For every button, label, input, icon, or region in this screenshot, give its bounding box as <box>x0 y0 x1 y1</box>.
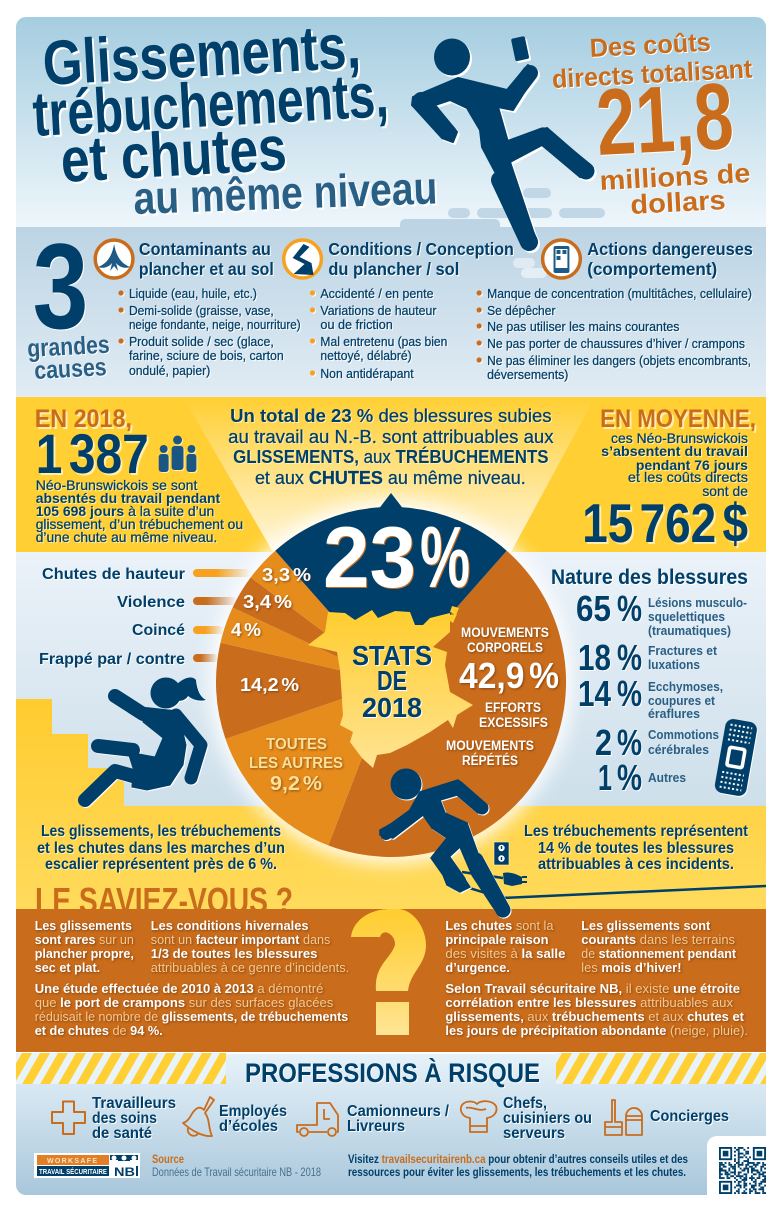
text: absences 2018: absentés du travail pendant <box>36 491 221 506</box>
pie label: others <box>249 736 343 795</box>
stat: 18% <box>578 637 718 678</box>
slice: 23% <box>275 493 507 682</box>
map label: Stats de 2018: STATS <box>352 640 432 671</box>
fact: clean floors: Les glissements <box>35 918 132 933</box>
causes background <box>16 227 766 397</box>
text: absences 2018: 105 698 jours à la suite d’un <box>36 504 214 519</box>
stat: 1%: Autres <box>648 770 686 785</box>
stat: 14% <box>578 673 723 721</box>
fact: precipitation: glissements, aux trébuchements et aux chutes et <box>445 1009 745 1024</box>
pie label: others: 9,2 % <box>270 773 322 795</box>
cost value: 21,8 <box>594 63 736 175</box>
fact: parking: Les glissements sont <box>581 918 711 933</box>
list: conditions: nettoyé, délabré) <box>320 348 412 363</box>
heading: nature: Nature des blessures <box>551 566 748 589</box>
fact: parking <box>581 918 737 975</box>
heading: contaminants: Contaminants au <box>139 239 271 259</box>
text: visit website: Visitez travailsecuritairenb.ca pour obtenir d’autres conseils utiles et des <box>348 1154 688 1166</box>
panel: professions <box>52 1095 729 1142</box>
text: average absence: sont de <box>702 484 748 499</box>
stat: 14%: éraflures <box>648 706 700 721</box>
profession: janitors <box>605 1100 729 1135</box>
big 23%: % <box>420 510 470 606</box>
fact: parking: courants dans les terrains <box>581 932 735 947</box>
text: tripping fact <box>524 823 748 873</box>
fact: parking: de stationnement pendant <box>581 946 737 961</box>
text: stairs fact: Les glissements, les trébuchements <box>41 823 281 840</box>
stat: 65%: (traumatiques) <box>648 623 731 638</box>
text: average absence <box>601 431 748 499</box>
number: 15 762 $: 15 762 $ <box>582 492 748 554</box>
legend: violence: Violence <box>117 594 185 611</box>
pie label: right: MOUVEMENTS <box>446 738 534 753</box>
list: contaminants <box>118 286 301 378</box>
text: absences 2018: d’une chute au même niveau. <box>36 530 217 545</box>
cost line 4: dollars <box>630 185 726 220</box>
big question mark <box>351 909 426 1035</box>
hazard stripes right <box>556 1053 766 1084</box>
list: actions: Ne pas porter de chaussures d’hiver / crampons <box>487 336 745 351</box>
logo: WorkSafe NB: WORKSAFE <box>47 1158 97 1165</box>
text: central statement: et aux CHUTES au même niveau. <box>255 467 526 488</box>
list: conditions: Mal entretenu (pas bien <box>320 334 447 349</box>
map label: Stats de 2018 <box>352 640 432 723</box>
icon: tripping runner <box>380 768 508 917</box>
title line 1: Glissements, <box>41 11 362 99</box>
list: actions: Manque de concentration (multitâches, cellulaire) <box>487 286 752 301</box>
icon: phone <box>543 240 580 278</box>
stat: 2%: % <box>617 722 642 763</box>
middle background <box>16 552 766 807</box>
stat: 65% <box>576 588 747 638</box>
slice: 3.4% <box>233 577 391 682</box>
header background <box>16 17 766 227</box>
fact: winter: 1/3 de toutes les blessures <box>151 946 317 961</box>
slice: others 9.2% <box>226 682 391 845</box>
heading: conditions <box>328 239 514 279</box>
fact: winter: sont un facteur important dans <box>151 932 330 947</box>
icon: contaminants <box>95 240 133 278</box>
legend: struck: Frappé par / contre <box>39 651 185 668</box>
profession: truckers: Camionneurs / <box>347 1103 450 1120</box>
bottom background <box>16 1054 766 1195</box>
pie label: right <box>446 625 559 768</box>
big number 3: 3 <box>33 218 88 354</box>
pie value labels left: 14,2 % <box>240 675 299 695</box>
heading: contaminants <box>139 239 274 279</box>
pie label: right: 42,9 % <box>459 655 559 696</box>
fact: emergency <box>445 918 565 975</box>
stat: 65%: % <box>617 588 642 629</box>
fact: emergency: des visites à la salle <box>445 946 565 961</box>
heading: actions: (comportement) <box>587 259 717 279</box>
stat: 65%: squelettiques <box>648 609 725 624</box>
number: 1 387: 1 387 <box>36 423 149 485</box>
heading: actions <box>587 239 753 279</box>
stat: 18%: % <box>617 637 642 678</box>
text: visit website <box>348 1154 688 1179</box>
legend: caught <box>132 622 224 639</box>
fact: precipitation: corrélation entre les blessures attribuables aux <box>445 995 734 1010</box>
icon: cord and plug <box>462 872 766 898</box>
fact: crampons: Une étude effectuée de 2010 à 2013 a démontré <box>35 981 323 996</box>
title line 3: et chutes <box>59 113 288 196</box>
slice: 14.2% <box>216 643 391 739</box>
list: contaminants: Demi-solide (graisse, vase, <box>129 303 274 318</box>
icon: woman falling on stairs <box>85 678 206 800</box>
title line 2: trébuchements, <box>31 60 390 150</box>
fact: precipitation <box>445 981 748 1038</box>
text: stairs fact: escalier représentent près de 6 %. <box>45 856 277 873</box>
slice: 3.3% <box>251 551 391 682</box>
text: source: Données de Travail sécuritaire NB - 2018 <box>152 1165 321 1179</box>
statistics yellow background <box>16 397 766 552</box>
text: stairs fact: et les chutes dans les marches d’un <box>37 840 285 857</box>
icon: wall socket <box>494 842 509 865</box>
fact: crampons <box>35 981 348 1038</box>
label: grandes causes <box>27 331 110 385</box>
text: tripping fact: Les trébuchements représentent <box>524 823 748 840</box>
title <box>31 11 438 224</box>
profession: chefs: serveurs <box>503 1125 565 1142</box>
fact: parking: les mois d’hiver! <box>581 960 682 975</box>
yellow stairs and ground <box>16 699 766 909</box>
slice: 4% <box>220 608 391 682</box>
pie label: right: EXCESSIFS <box>479 715 548 730</box>
stat: 1% <box>598 757 686 798</box>
fact: winter: attribuables à ce genre d’incidents. <box>151 960 349 975</box>
text: tripping fact: attribuables à ces incidents. <box>538 856 734 873</box>
legend: violence <box>117 594 237 611</box>
panel: nature of injuries <box>551 566 758 798</box>
fact: clean floors: sec et plat. <box>35 960 100 975</box>
legend: falls from height <box>42 566 251 583</box>
text: average absence: et les coûts directs <box>628 470 748 485</box>
list: actions: Se dépêcher <box>487 303 556 318</box>
hazard stripes left <box>16 1053 226 1084</box>
panel: 2018 statistics <box>35 405 756 554</box>
cost line 3: millions de <box>599 158 751 196</box>
profession: truckers: Livreurs <box>347 1118 405 1135</box>
heading: En 2018: EN 2018, <box>35 405 132 433</box>
stat: 65%: Lésions musculo- <box>648 595 747 610</box>
profession: truckers <box>297 1103 450 1136</box>
list: contaminants: farine, sciure de bois, carton <box>129 348 284 363</box>
profession: school employees: Employés <box>219 1103 287 1120</box>
icon: people <box>159 436 196 472</box>
pie glow <box>209 500 573 864</box>
profession: chefs <box>461 1095 592 1142</box>
fact: precipitation: Selon Travail sécuritaire NB, il existe une étroite <box>445 981 740 996</box>
pie value labels left: 4 % <box>231 620 261 640</box>
logo: WorkSafe NB: TRAVAIL SÉCURITAIRE <box>39 1167 107 1176</box>
text: central statement: GLISSEMENTS, aux TRÉBUCHEMENTS <box>233 446 549 467</box>
stat: 18%: Fractures et <box>648 643 718 658</box>
icon: winding road <box>284 240 321 278</box>
logo: WorkSafe NB: NB <box>114 1165 135 1179</box>
fact: emergency: principale raison <box>445 932 549 947</box>
fact: winter: Les conditions hivernales <box>151 918 309 933</box>
pie label: right: EFFORTS <box>485 700 541 715</box>
label: grandes causes: grandes <box>27 331 110 363</box>
text: average absence: s’absentent du travail <box>601 444 748 459</box>
profession: health care: des soins <box>92 1110 157 1127</box>
profession: school employees: d’écoles <box>219 1118 278 1135</box>
heading: conditions: du plancher / sol <box>328 259 459 279</box>
title line 4: au même niveau <box>133 161 438 224</box>
icon: bandage <box>714 718 758 797</box>
slice: efforts 42.9% <box>328 551 566 857</box>
stat: 1%: % <box>617 757 642 798</box>
profession: chefs: Chefs, <box>503 1095 547 1112</box>
text: absences 2018 <box>36 478 243 545</box>
heading: conditions: Conditions / Conception <box>328 239 514 259</box>
map label: Stats de 2018: DE <box>377 665 407 696</box>
pie label: others: TOUTES <box>266 736 327 753</box>
cost line 2: directs totalisant <box>551 55 753 94</box>
map label: Stats de 2018: 2018 <box>362 692 422 723</box>
heading: contaminants: plancher et au sol <box>139 259 274 279</box>
stat: 65%: 65 <box>576 588 611 629</box>
label: grandes causes: causes <box>34 353 107 385</box>
profession: chefs: cuisiniers ou <box>503 1110 592 1127</box>
pie chart <box>216 493 566 857</box>
text: source <box>152 1152 321 1179</box>
brown overlap <box>16 909 356 917</box>
list: conditions: Variations de hauteur <box>320 303 437 318</box>
stat: 14%: 14 <box>578 673 611 714</box>
logo: WorkSafe NB <box>34 1153 140 1179</box>
text: central statement <box>228 405 554 488</box>
heading: En moyenne: EN MOYENNE, <box>600 405 756 433</box>
text: stairs fact <box>37 823 285 873</box>
central light wedge <box>183 397 595 552</box>
profession: health care <box>52 1095 176 1142</box>
ground dashes <box>400 188 605 278</box>
panel: three causes <box>27 218 753 385</box>
pie label: others: LES AUTRES <box>249 755 343 772</box>
stat: 14%: coupures et <box>648 693 716 708</box>
QR corner <box>707 1136 777 1210</box>
stat: 14%: Ecchymoses, <box>648 679 723 694</box>
list: contaminants: ondulé, papier) <box>129 363 210 378</box>
stat: 14%: % <box>617 673 642 714</box>
stat: 2%: Commotions <box>648 727 719 742</box>
map: islands <box>447 606 459 623</box>
list: actions: Ne pas utiliser les mains courantes <box>487 319 680 334</box>
list: conditions: ou de friction <box>320 317 393 332</box>
heading: professions: PROFESSIONS À RISQUE <box>245 1057 540 1088</box>
stat: 2%: cérébrales <box>648 742 709 757</box>
stat: 18%: 18 <box>578 637 611 678</box>
fact: clean floors: sont rares sur un <box>35 932 134 947</box>
pie value labels left: 3,4 % <box>243 592 292 612</box>
text: absences 2018: glissement, d’un trébuchement ou <box>36 517 243 532</box>
map: New Brunswick <box>308 610 473 768</box>
list: contaminants: neige fondante, neige, nourriture) <box>129 317 301 332</box>
pie label: right: CORPORELS <box>467 640 543 655</box>
icon: slipping man <box>412 36 593 250</box>
text: visit website: ressources pour éviter les glissements, les trébuchements et les chutes. <box>348 1167 686 1179</box>
fact: crampons: que le port de crampons sur des surfaces glacées <box>35 995 333 1010</box>
list: conditions <box>310 286 447 381</box>
profession: school employees <box>183 1097 287 1136</box>
fact: precipitation: les jours de précipitation abondante (neige, pluie). <box>445 1023 748 1038</box>
heading: Le saviez-vous: LE SAVIEZ-VOUS ? <box>35 880 293 921</box>
text: absences 2018: Néo-Brunswickois se sont <box>36 478 198 493</box>
profession: janitors: Concierges <box>650 1108 729 1125</box>
list: conditions: Non antidérapant <box>320 366 414 381</box>
fact: crampons: réduisait le nombre de glissements, de trébuchements <box>35 1009 348 1024</box>
fact: clean floors <box>35 918 134 975</box>
legend: other causes <box>39 566 251 668</box>
list: contaminants: Liquide (eau, huile, etc.) <box>129 286 257 301</box>
text: average absence: ces Néo-Brunswickois <box>611 431 748 446</box>
legend: caught: Coincé <box>132 622 185 639</box>
text: central statement: au travail au N.-B. sont attribuables aux <box>228 426 554 447</box>
stat: 2%: 2 <box>595 722 612 763</box>
fact: clean floors: plancher propre, <box>35 946 134 961</box>
big 23% <box>323 510 470 606</box>
pie value labels left <box>231 565 311 695</box>
list: conditions: Accidenté / en pente <box>320 286 434 301</box>
panel: did you know facts <box>35 918 748 1038</box>
list: contaminants: Produit solide / sec (glace, <box>129 334 274 349</box>
fact: crampons: et de chutes de 94 %. <box>35 1023 163 1038</box>
text: central statement: Un total de 23 % des blessures subies <box>230 405 552 426</box>
list: actions: déversements) <box>487 367 568 382</box>
stat: 18%: luxations <box>648 657 700 672</box>
text: average absence: pendant 76 jours <box>636 458 748 473</box>
pie label: right: MOUVEMENTS <box>461 625 549 640</box>
QR code <box>719 1147 766 1194</box>
big 23%: 23 <box>323 510 416 606</box>
profession: health care: Travailleurs <box>92 1095 176 1112</box>
fact: emergency: d’urgence. <box>445 960 510 975</box>
stat: 1%: 1 <box>598 757 612 798</box>
brown fact panel <box>16 909 766 1052</box>
list: actions: Ne pas éliminer les dangers (objets encombrants, <box>487 353 751 368</box>
text: source: Source <box>152 1152 184 1166</box>
text: tripping fact: 14 % de toutes les blessures <box>538 840 734 857</box>
cost callout <box>551 29 753 220</box>
pie label: right: RÉPÉTÉS <box>462 753 518 768</box>
heading: actions: Actions dangereuses <box>587 239 753 259</box>
cost line 1: Des coûts <box>589 29 711 63</box>
fact: emergency: Les chutes sont la <box>445 918 554 933</box>
legend: falls from height: Chutes de hauteur <box>42 566 185 583</box>
pie value labels left: 3,3 % <box>262 565 311 585</box>
list: actions <box>477 286 752 382</box>
fact: winter <box>151 918 349 975</box>
profession: health care: de santé <box>92 1125 152 1142</box>
stat: 2% <box>595 722 719 763</box>
